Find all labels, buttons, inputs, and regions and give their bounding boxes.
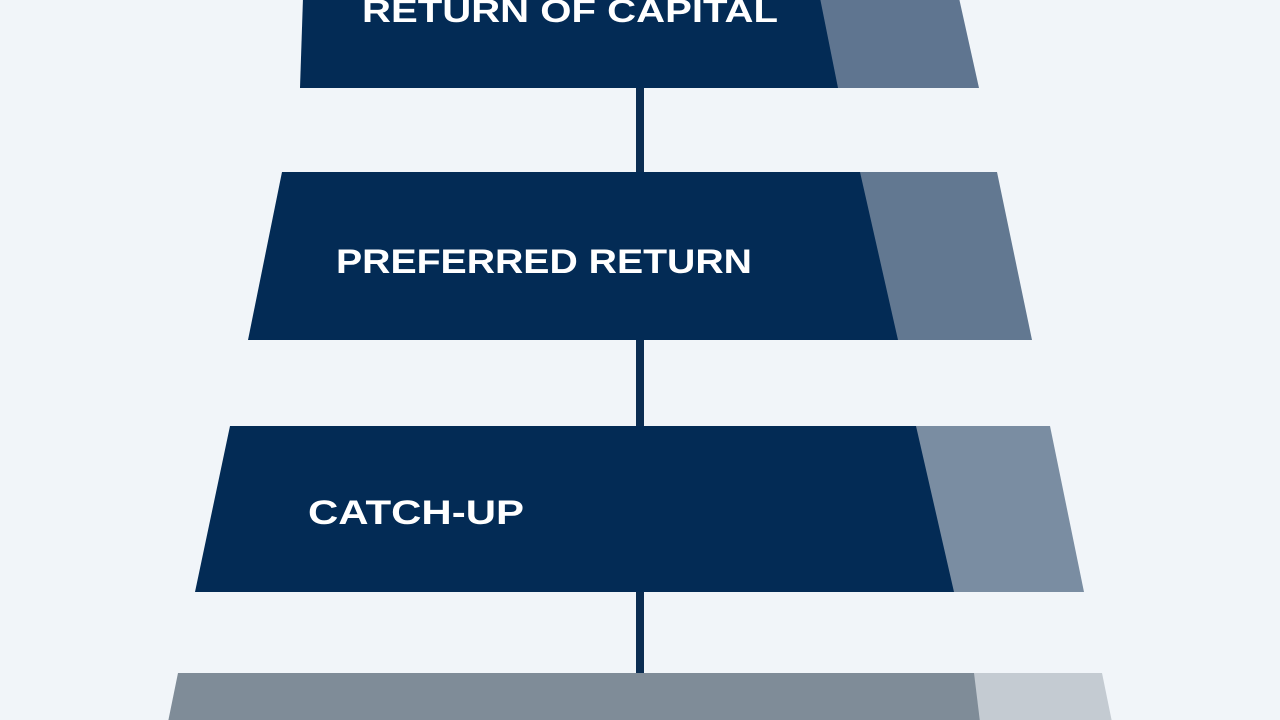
tier 2: preferred return: PREFERRED RETURN	[336, 243, 752, 281]
tier 2: preferred return	[248, 172, 1032, 340]
tier 4: carried interest (partially visible)	[168, 673, 1112, 720]
connector lines	[636, 86, 644, 675]
tier 3: catch-up: CATCH-UP	[308, 494, 524, 532]
tier 1: return of capital	[300, 0, 979, 88]
tier 3: catch-up	[195, 426, 1084, 592]
